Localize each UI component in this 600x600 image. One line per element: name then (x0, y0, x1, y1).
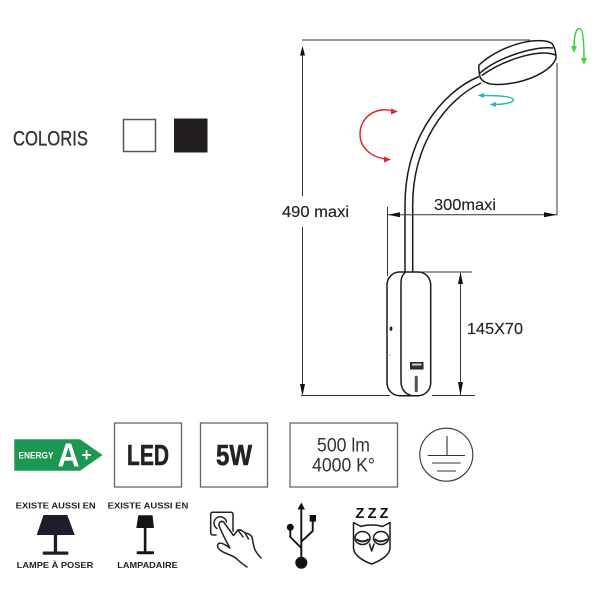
arrow: cyan rotation (478, 93, 514, 107)
energy label: + (82, 445, 92, 465)
icon: sleeping owl (354, 506, 390, 564)
dimension: base 145x70: 145X70 (467, 321, 523, 338)
box: 5W (200, 423, 268, 487)
usb port (410, 362, 423, 369)
box: lumens and temperature: 4000 K° (312, 454, 375, 476)
label: floor lamp variant: EXISTE AUSSI EN (108, 500, 188, 510)
icon: floor lamp (136, 515, 154, 554)
swatch: black (174, 118, 208, 152)
energy label (14, 437, 102, 474)
icon: usb (287, 502, 316, 569)
lamp head (479, 41, 556, 84)
icon: table lamp (37, 515, 75, 555)
swatch: white (124, 120, 156, 152)
box: 5W: 5W (216, 440, 253, 472)
box: LED (114, 423, 182, 487)
coloris heading: COLORIS (13, 128, 88, 150)
label: table lamp variant (16, 500, 96, 570)
dimension: height 490 (282, 40, 530, 396)
label: table lamp variant: EXISTE AUSSI EN (16, 500, 96, 510)
icon: earth ground (420, 428, 473, 481)
power slot (415, 376, 418, 392)
label: floor lamp variant (108, 500, 188, 570)
lamp arm (405, 76, 481, 272)
side button (390, 326, 392, 331)
box: lumens and temperature (290, 423, 398, 487)
arrow: green rotation (571, 28, 587, 65)
icon: sleeping owl: ZZZ (356, 506, 389, 522)
dimension: width 300: 300maxi (434, 197, 496, 214)
dimension: width 300 (388, 63, 557, 276)
label: floor lamp variant: LAMPADAIRE (117, 560, 178, 570)
wall base (387, 272, 431, 396)
lamp technical drawing (387, 41, 556, 396)
energy label: A (58, 437, 80, 474)
icon: touch switch (211, 512, 261, 567)
label: table lamp variant: LAMPE À POSER (17, 560, 93, 570)
dimension: height 490: 490 maxi (282, 204, 349, 221)
box: LED: LED (127, 440, 169, 472)
arrow: red rotation (360, 108, 398, 162)
dimension: base 145x70 (420, 272, 523, 396)
box: lumens and temperature: 500 lm (317, 434, 370, 456)
energy label: ENERGY (18, 450, 54, 460)
